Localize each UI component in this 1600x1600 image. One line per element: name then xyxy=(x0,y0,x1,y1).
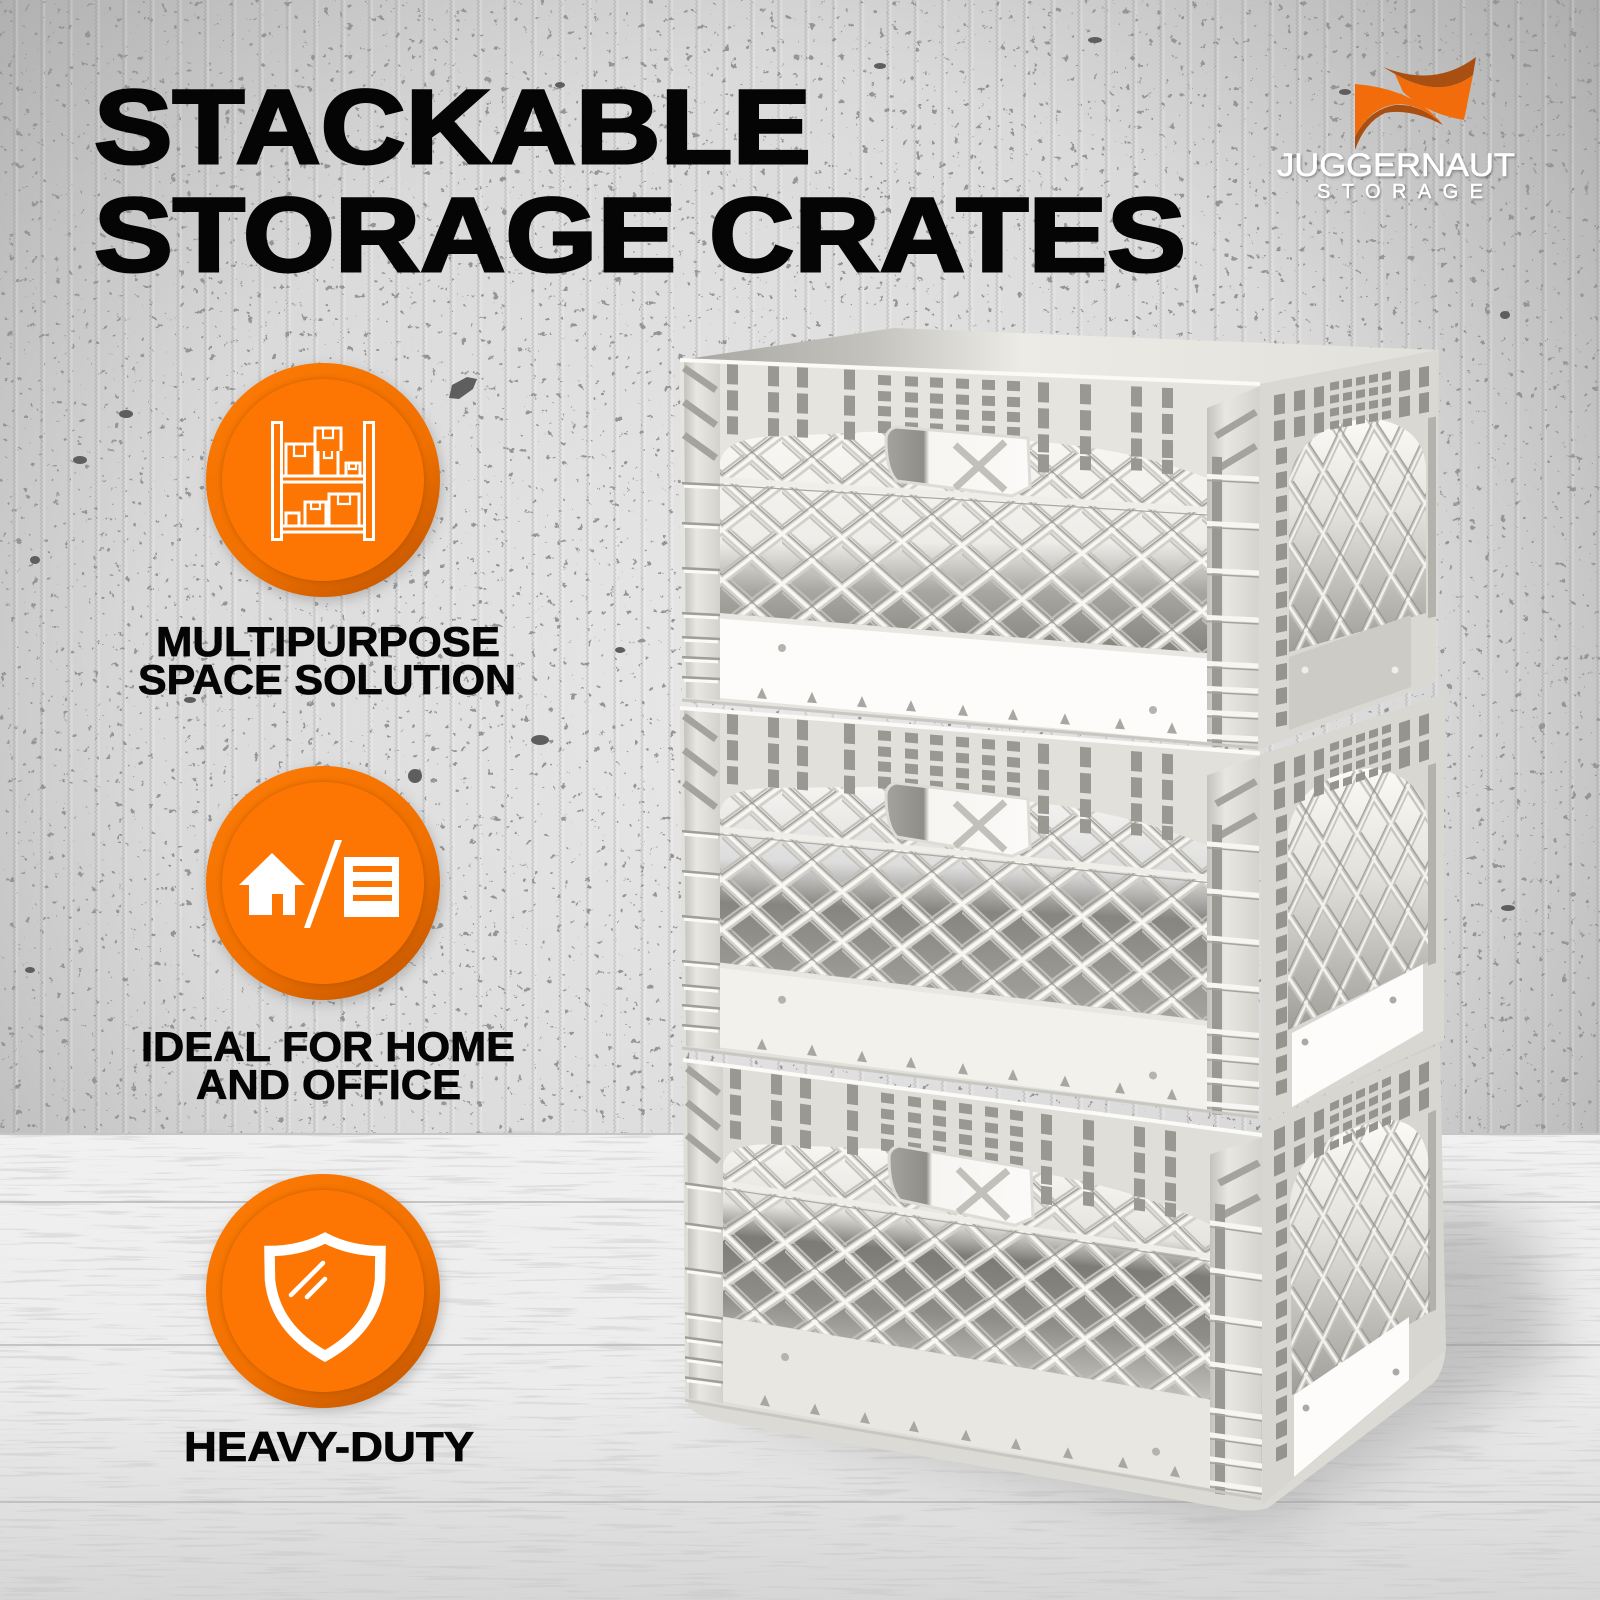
crate shadow on floor xyxy=(700,1200,1560,1530)
crate interior xyxy=(680,328,1439,384)
label: HEAVY-DUTY xyxy=(184,1423,474,1470)
logo wordmark xyxy=(1277,147,1515,203)
crate 1 side face xyxy=(1258,350,1439,750)
label: MULTIPURPOSE xyxy=(156,618,500,665)
logo wordmark: JUGGERNAUT xyxy=(1277,147,1515,183)
label: SPACE SOLUTION xyxy=(138,656,516,703)
icon: shelving with boxes xyxy=(206,363,442,601)
background: white wood floor xyxy=(0,1134,1600,1600)
crate 3 (bottom) xyxy=(683,1044,1446,1510)
stacked crates xyxy=(680,328,1446,1510)
title: STORAGE CRATES xyxy=(94,177,1186,294)
title xyxy=(94,69,1186,294)
logo mark xyxy=(1355,57,1476,150)
crate 1 front face xyxy=(680,360,1260,749)
label: AND OFFICE xyxy=(196,1061,461,1108)
crate 3 foot xyxy=(684,1340,1446,1510)
icon: shield xyxy=(206,1174,442,1412)
crate 2 (middle) xyxy=(680,694,1444,1122)
title: STACKABLE xyxy=(94,69,811,186)
crate 2 front face xyxy=(680,708,1260,1118)
icon: house and document xyxy=(206,766,442,1004)
background: concrete wall xyxy=(0,0,1600,1140)
logo wordmark: STORAGE xyxy=(1317,181,1483,203)
logo: Juggernaut Storage xyxy=(1277,57,1515,203)
feature 2: ideal for home and office xyxy=(141,766,515,1108)
feature 3: heavy-duty xyxy=(184,1174,474,1470)
feature 1: multipurpose space solution xyxy=(138,363,516,703)
crate 1 (top) xyxy=(680,328,1439,750)
crate 2 side face xyxy=(1260,694,1444,1122)
label xyxy=(141,1023,515,1108)
crate 3 side face xyxy=(1262,1044,1446,1505)
crate 3 front face xyxy=(683,1060,1263,1500)
label xyxy=(138,618,516,703)
label: IDEAL FOR HOME xyxy=(141,1023,515,1070)
